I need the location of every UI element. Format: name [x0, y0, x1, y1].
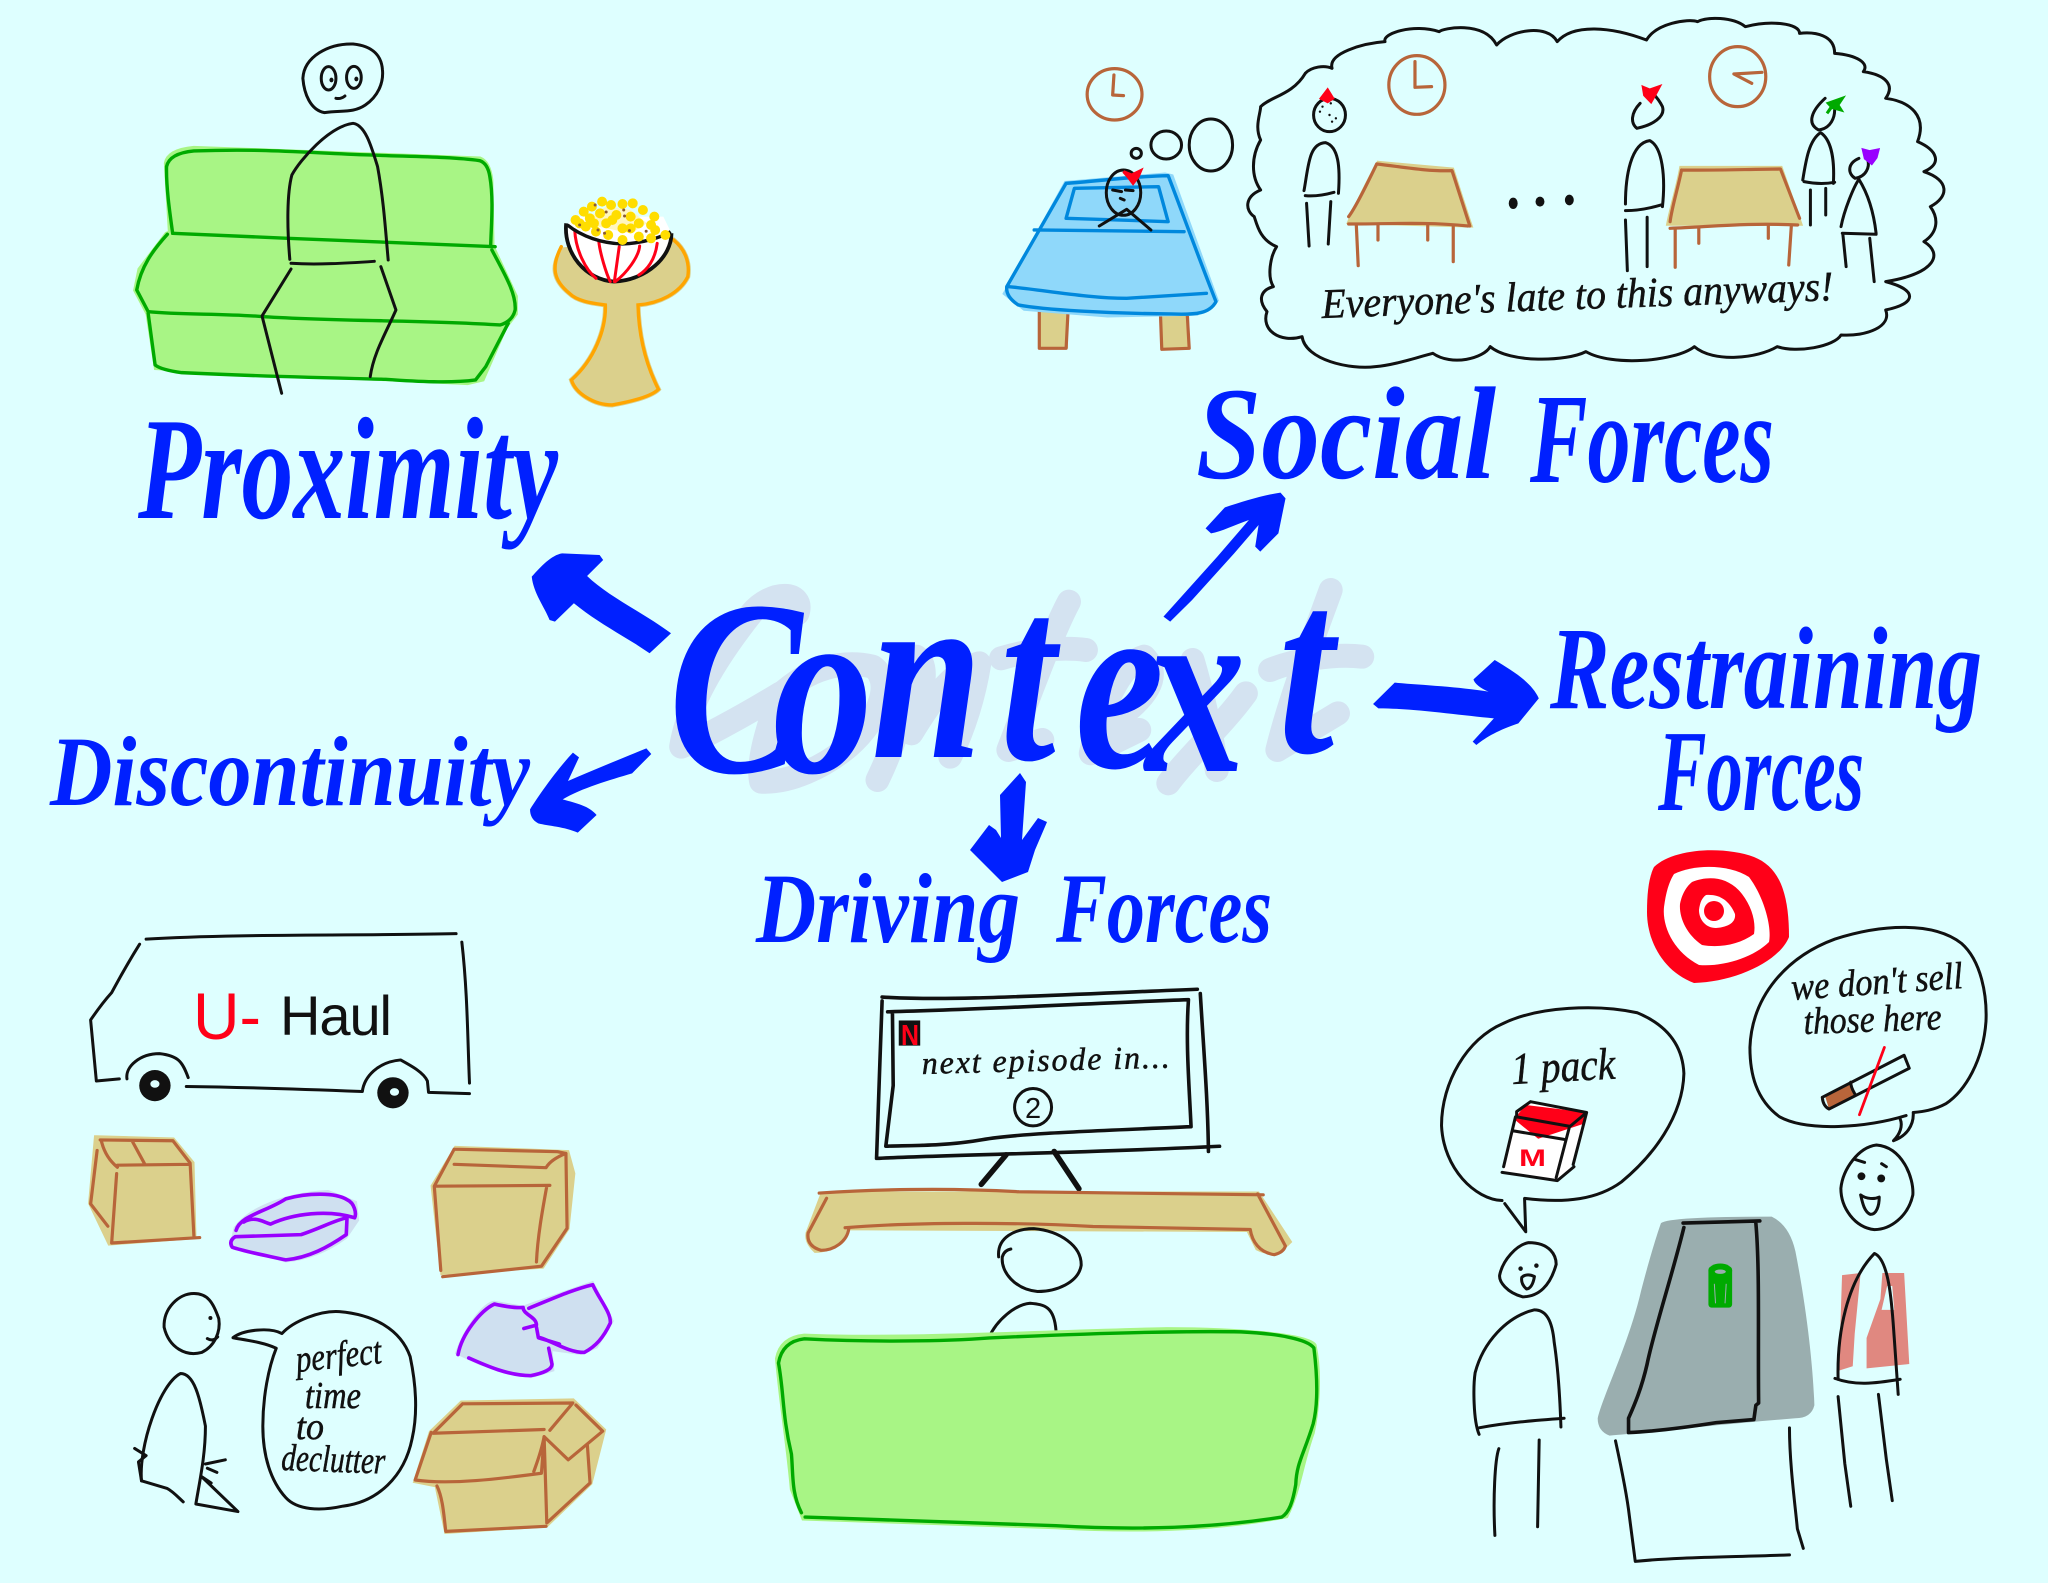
icon: coffee table: [808, 1189, 1289, 1255]
icon: open box: [415, 1401, 603, 1531]
icon: netflix logo background: [899, 1020, 920, 1046]
icon: person sitting on sofa: [262, 44, 396, 393]
icon: customer person: [1474, 1243, 1564, 1535]
panel: proximity illustration: [137, 44, 688, 405]
icon: person at second table: [1625, 87, 1664, 271]
shadow: behind Context title: [681, 590, 1362, 783]
pack lettering: M: M: [1519, 1145, 1546, 1172]
thought cloud: [1248, 18, 1944, 367]
title: Context: Context: [669, 529, 1339, 826]
countdown number: 2: [1025, 1093, 1041, 1125]
icon: shop counter with cashier station: [1598, 1217, 1814, 1561]
speech bubble: 1 pack: [1442, 1008, 1684, 1232]
arrow: to Discontinuity: [530, 748, 651, 833]
netflix N: N: [901, 1020, 919, 1052]
panel: driving forces illustration: [778, 989, 1317, 1528]
icon: second clock in thought: [1710, 47, 1766, 107]
icon: person with green bow: [1803, 98, 1842, 225]
icon: closed box small: [91, 1138, 200, 1243]
icon: target logo: [1647, 850, 1789, 983]
icon: side table: [555, 240, 688, 405]
heading: Driving Forces: [755, 853, 1272, 964]
icon: bed with sleeping person: [1006, 170, 1216, 349]
tv text: next episode in...: next episode in...: [921, 1039, 1170, 1081]
speech bubble: [233, 1312, 416, 1509]
icon: person from behind: [989, 1229, 1081, 1338]
van lettering: Haul: Haul: [280, 984, 392, 1047]
icon: crumpled clothes: [458, 1284, 611, 1376]
speech text: perfect time to declutter: [281, 1330, 386, 1483]
speech text: perfect time to declutter: time: [305, 1375, 361, 1417]
heading: Driving Forces: Forces: [1055, 853, 1272, 964]
arrow: to Restraining Forces: [1373, 660, 1539, 745]
icon: cigarette pack: [1502, 1102, 1587, 1181]
icon: sofa from behind: [778, 1331, 1317, 1528]
icon: countdown circle: [1015, 1089, 1052, 1126]
icon: television: [877, 989, 1220, 1189]
icon: green sofa: [137, 149, 515, 382]
icon: clock in thought: [1389, 56, 1445, 114]
speech text: Everyone's late to this anyways: Everyone's late to this anyways!: [1320, 264, 1834, 328]
heading: Restraining Forces: Forces: [1657, 708, 1864, 835]
icon: crossed-out cigarette: [1822, 1047, 1909, 1115]
heading: Proximity: Proximity: [137, 388, 559, 550]
speech text: we don't sell those here: those here: [1803, 996, 1942, 1043]
icon: ellipsis dots: [1509, 195, 1574, 209]
icon: folded clothes: [231, 1193, 357, 1260]
icon: first table: [1349, 163, 1470, 266]
speech bubble: we don't sell: [1750, 927, 1986, 1141]
speech text: 1 pack: 1 pack: [1510, 1039, 1617, 1094]
panel: restraining forces illustration: [1442, 927, 1986, 1561]
heading: Social Forces: Forces: [1529, 368, 1774, 510]
heading: Restraining Forces: [1549, 603, 1982, 835]
icon: popcorn bowl: [566, 202, 671, 282]
heading: Social Forces: Social: [1196, 360, 1496, 507]
arrow: to Social Forces: [1163, 493, 1286, 622]
icon: green can: [1708, 1263, 1732, 1308]
heading: Social Forces: [1196, 360, 1774, 510]
icon: first person alone at table: [1304, 90, 1345, 246]
arrow: to Driving Forces: [970, 773, 1047, 882]
icon: second table: [1669, 168, 1800, 267]
icon: person sitting: [135, 1294, 238, 1512]
icon: moving van: [91, 934, 469, 1108]
icon: cashier person: [1835, 1145, 1913, 1506]
icon: backpack: [1839, 1273, 1909, 1371]
heading: Driving Forces: Driving: [755, 853, 1020, 964]
heading: Discontinuity: Discontinuity: [49, 716, 531, 827]
speech text: perfect time to declutter: declutter: [281, 1437, 386, 1483]
icon: large closed box: [433, 1148, 573, 1277]
speech text: perfect time to declutter: perfect: [291, 1330, 385, 1381]
speech text: perfect time to declutter: to: [296, 1406, 324, 1448]
panel: social forces illustration: [1006, 18, 1944, 367]
icon: person with purple bow: [1841, 150, 1878, 282]
speech text: we don't sell those here: we don't sell: [1790, 955, 1964, 1009]
icon: wall clock: [1087, 69, 1142, 120]
icon: thought dots: [1131, 119, 1233, 171]
panel: discontinuity illustration: [91, 934, 611, 1531]
van lettering: U-: U-: [193, 979, 261, 1053]
arrow: to Proximity: [532, 553, 671, 653]
speech text: we don't sell those here: [1790, 955, 1964, 1043]
